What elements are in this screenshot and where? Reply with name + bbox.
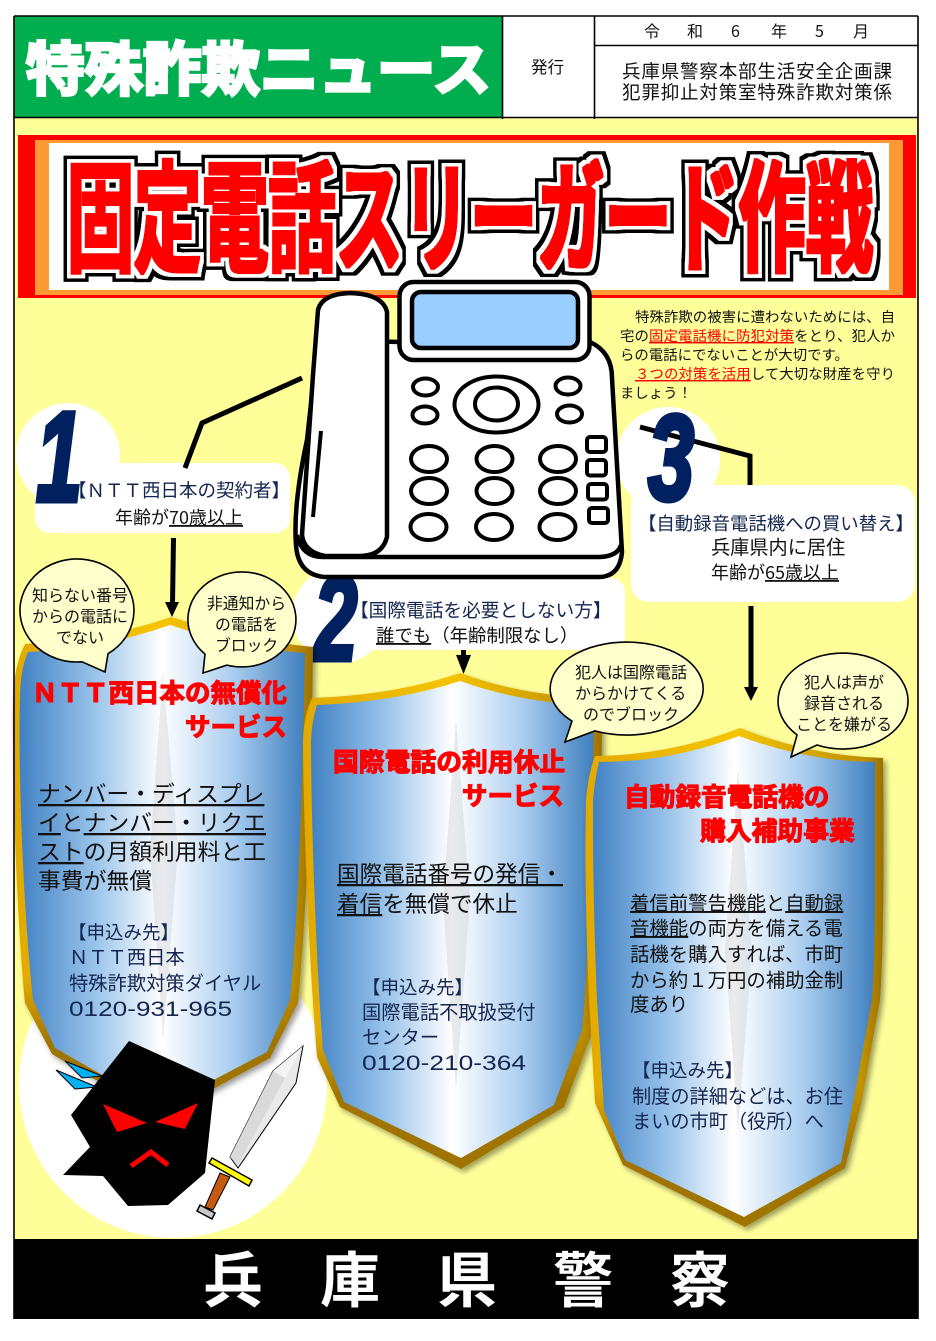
callout: block hidden numbers: 非通知から xyxy=(207,591,286,614)
phone body xyxy=(295,340,622,577)
arrow to shield 2 xyxy=(456,650,471,674)
shield 2 heading xyxy=(333,742,565,813)
shield 3 body xyxy=(630,887,843,1017)
mouth xyxy=(131,1152,168,1166)
label 3: eligibility: 【自動録音電話機への買い替え】 xyxy=(638,510,914,536)
newsletter title: 特殊詐欺ニュース xyxy=(26,23,491,107)
banner title: 固定電話スリーガード作戦 xyxy=(67,123,873,298)
intro paragraph: ３つの対策を活用して大切な財産を守り xyxy=(635,363,895,384)
shield 3 contact: 【申込み先】 xyxy=(632,1057,743,1083)
shield 1: NTT service xyxy=(13,617,313,1118)
callout: criminals dislike recording: 録音される xyxy=(804,690,884,714)
shield 2: international service xyxy=(303,673,602,1169)
shield 2 body: 着信を無償で休止 xyxy=(337,886,518,919)
issuing department xyxy=(622,58,892,105)
shield 1 heading: サービス xyxy=(185,707,287,744)
keypad xyxy=(410,446,576,540)
side keys xyxy=(587,437,608,523)
headband tails xyxy=(65,1061,102,1078)
shield 3 contact xyxy=(632,1057,843,1134)
function keys xyxy=(412,376,582,432)
callout: unknown numbers xyxy=(20,559,134,672)
callout: international calls: 犯人は国際電話 xyxy=(575,659,687,683)
shield 1 contact: ＮＴＴ西日本 xyxy=(69,942,185,970)
eyes xyxy=(103,1104,147,1132)
label 1: eligibility: 年齢が70歳以上 xyxy=(115,504,243,530)
villain character xyxy=(56,1041,215,1206)
shield 3 contact: まいの市町（役所）へ xyxy=(632,1106,824,1134)
header green title panel xyxy=(14,16,502,117)
shield 3 contact: 制度の詳細などは、お住 xyxy=(632,1081,843,1109)
label 1: eligibility: 【ＮＴＴ西日本の契約者】 xyxy=(68,477,290,503)
date: 令和6年5月 xyxy=(644,18,869,42)
label 2: eligibility: 誰でも（年齢制限なし） xyxy=(376,622,578,648)
shield 2 contact: 【申込み先】 xyxy=(362,974,473,1000)
shield 2 contact: 国際電話不取扱受付 xyxy=(362,997,536,1025)
shield 2 body xyxy=(337,856,563,919)
shield 1 body: ナンバー・ディスプレ xyxy=(38,776,264,809)
callout: criminals dislike recording: ことを嫌がる xyxy=(796,711,892,735)
callout: block hidden numbers: ブロック xyxy=(215,633,278,656)
shield 1 body: 事費が無償 xyxy=(38,863,152,896)
connector line from phone to label 3 xyxy=(640,427,750,486)
title banner xyxy=(18,123,916,298)
shield 1 heading: ＮＴＴ西日本の無償化 xyxy=(32,673,287,710)
shield 3 heading xyxy=(624,777,855,848)
white spot behind villain xyxy=(19,930,327,1238)
label 2: eligibility xyxy=(292,552,625,686)
callout: unknown numbers: からの電話に xyxy=(32,603,128,627)
shield 1 contact: 0120-931-965 xyxy=(69,998,232,1021)
shield 3 heading: 自動録音電話機の xyxy=(624,777,830,814)
shield 3 body: から約１万円の補助金制 xyxy=(630,964,843,993)
callout: block hidden numbers: の電話を xyxy=(215,612,278,635)
callout: unknown numbers: 知らない番号 xyxy=(32,582,128,606)
number 3: 3 xyxy=(648,391,694,527)
shield 2 heading: サービス xyxy=(462,776,564,813)
shield 2 contact xyxy=(362,974,536,1075)
shield 2 contact: センター xyxy=(362,1022,439,1050)
label 3: eligibility xyxy=(616,391,915,602)
intro paragraph: らの電話にでないことが大切です。 xyxy=(620,344,849,365)
label 2: eligibility: 【国際電話を必要としない方】 xyxy=(350,596,612,623)
callout: unknown numbers: でない xyxy=(56,624,104,648)
label 1: eligibility xyxy=(16,385,290,533)
callout: block hidden numbers xyxy=(188,572,296,673)
shield 1 body xyxy=(38,776,266,896)
shield 1 body: ストの月額利用料と工 xyxy=(38,834,266,867)
issuer label: 発行 xyxy=(531,54,564,78)
callout: international calls xyxy=(550,642,703,742)
connector: phone to label 1 xyxy=(185,378,302,468)
shield 3 body: 音機能の両方を備える電 xyxy=(630,912,843,941)
intro paragraph: 宅の固定電話機に防犯対策をとり、犯人か xyxy=(620,325,895,346)
shield 2 heading: 国際電話の利用休止 xyxy=(333,742,565,779)
sword xyxy=(197,1046,303,1219)
intro paragraph: 特殊詐欺の被害に遭わないためには、自 xyxy=(635,306,895,327)
intro paragraph: ましょう！ xyxy=(620,382,692,403)
head xyxy=(63,1041,215,1206)
shield 3: answering machine subsidy xyxy=(585,728,884,1227)
shield 1 heading xyxy=(32,673,287,744)
callout: criminals dislike recording: 犯人は声が xyxy=(804,669,884,693)
callout: criminals dislike recording xyxy=(778,653,908,757)
shield 3 body: 話機を購入すれば、市町 xyxy=(630,938,843,967)
issuing department: 兵庫県警察本部生活安全企画課 xyxy=(622,58,892,84)
callout: international calls: のでブロック xyxy=(583,701,679,725)
header table lines xyxy=(14,16,918,119)
footer text: 兵庫県警察 xyxy=(203,1233,730,1320)
label 3: eligibility: 年齢が65歳以上 xyxy=(711,559,839,585)
shield 1 contact xyxy=(68,919,261,1021)
label 3: eligibility: 兵庫県内に居住 xyxy=(711,532,845,560)
intro paragraph xyxy=(620,306,895,403)
telephone xyxy=(295,282,622,577)
shield 1 body: イとナンバー・リクエ xyxy=(38,805,266,838)
issuing department: 犯罪抑止対策室特殊詐欺対策係 xyxy=(622,79,892,105)
arrow to shield 3 xyxy=(744,606,758,701)
shield 3 heading: 購入補助事業 xyxy=(700,811,855,848)
display xyxy=(400,282,590,360)
header xyxy=(14,16,918,119)
callout: international calls: からかけてくる xyxy=(575,680,686,704)
shield 1 contact: 【申込み先】 xyxy=(68,919,179,945)
footer band xyxy=(14,1233,918,1320)
shield 3 body: 着信前警告機能と自動録 xyxy=(630,887,843,916)
shield 2 body: 国際電話番号の発信・ xyxy=(337,856,563,889)
shield 1 contact: 特殊詐欺対策ダイヤル xyxy=(69,968,261,996)
arrow to shield 1 xyxy=(165,538,179,617)
number 1: 1 xyxy=(36,385,82,528)
shield 3 body: 度あり xyxy=(630,988,688,1017)
number 2: 2 xyxy=(312,552,357,686)
handset xyxy=(302,293,387,556)
shield 2 contact: 0120-210-364 xyxy=(362,1052,526,1075)
